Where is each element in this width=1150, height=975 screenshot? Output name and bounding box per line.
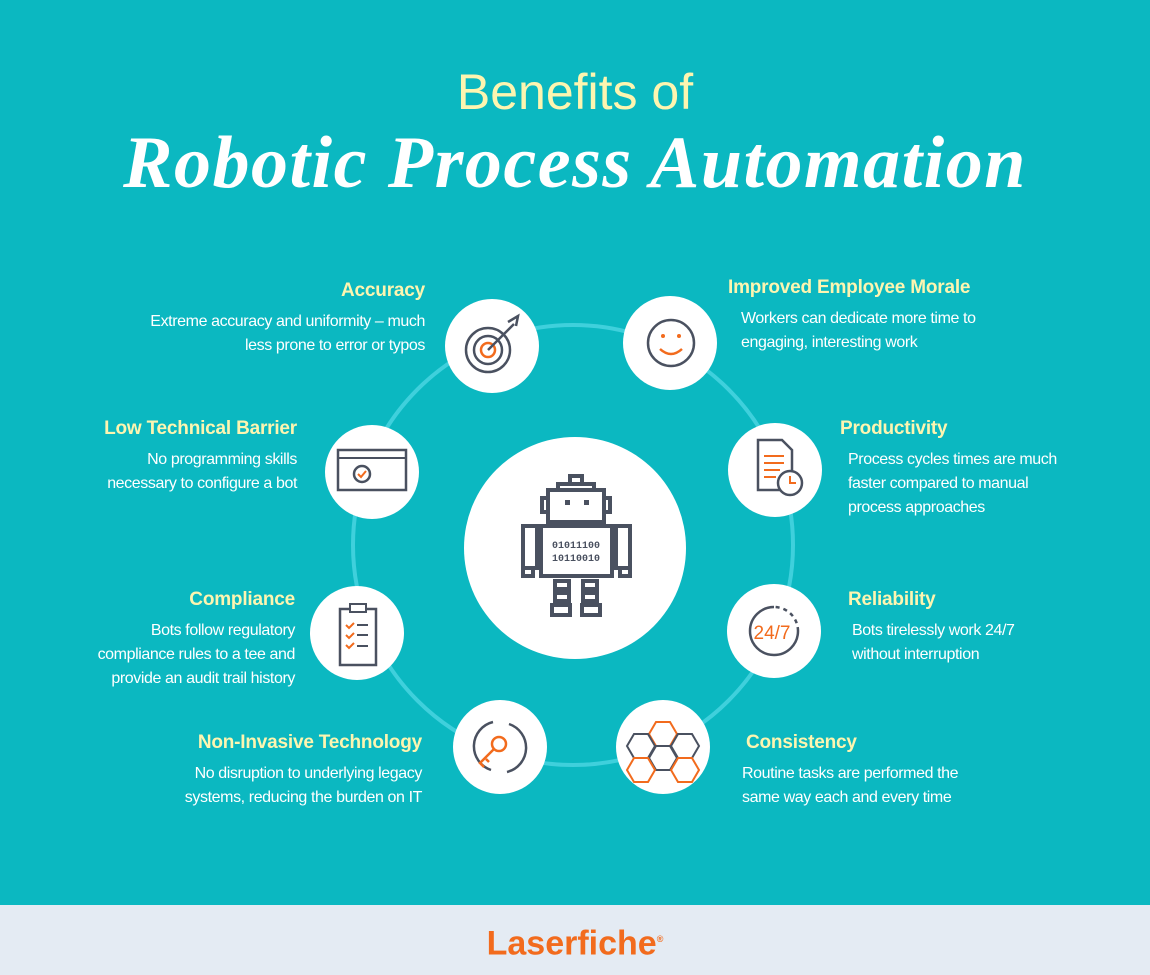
icon: target [445,299,539,393]
text: non-invasive: systems, reducing the burden on IT [185,789,422,806]
text: morale [728,277,976,351]
text: consistency: Consistency [746,732,857,753]
icon: browser [325,425,419,519]
text: productivity: process approaches [848,499,985,516]
text: compliance: compliance rules to a tee and [98,646,295,663]
text: accuracy [150,280,426,354]
text: consistency [742,732,958,806]
text: non-invasive: No disruption to underlying legacy [195,765,422,782]
icon: 24/7 [727,584,821,678]
icon: document clock [728,423,822,517]
icon: key refresh [453,700,547,794]
text: morale: Improved Employee Morale [728,277,970,298]
center robot [464,437,686,659]
text: low technical barrier: Low Technical Barrier [104,418,297,439]
text: consistency: same way each and every time [742,789,951,806]
text: morale: Workers can dedicate more time to [741,310,976,327]
text: accuracy: less prone to error or typos [245,337,425,354]
text: reliability: without interruption [852,646,979,663]
text: reliability: Bots tirelessly work 24/7 [852,622,1015,639]
icon: smile [623,296,717,390]
title: Robotic Process Automation [123,122,1027,204]
text: non-invasive [185,732,422,806]
text: reliability [848,589,1015,663]
text: low technical barrier [104,418,298,492]
center robot: 10110010 [552,554,600,565]
text: consistency: Routine tasks are performed the [742,765,958,782]
text: productivity: faster compared to manual [848,475,1028,492]
text: productivity: Process cycles times are much [848,451,1057,468]
text: compliance: Compliance [189,589,295,610]
icon: hexagons [616,700,710,794]
logo: Laserfiche® [487,924,663,962]
center robot: 01011100 [552,541,600,552]
text: productivity: Productivity [840,418,947,439]
icon: clipboard [310,586,404,680]
text: low technical barrier: No programming skills [147,451,297,468]
text: compliance [98,589,296,687]
title: Benefits of [457,64,693,120]
text: non-invasive: Non-Invasive Technology [198,732,422,753]
title [123,64,1027,204]
text: reliability: Reliability [848,589,936,610]
icon: 24/7: 24/7 [754,623,790,644]
text: low technical barrier: necessary to configure a bot [107,475,297,492]
text: compliance: Bots follow regulatory [151,622,295,639]
text: accuracy: Extreme accuracy and uniformity – much [150,313,425,330]
text: morale: engaging, interesting work [741,334,917,351]
footer [0,905,1150,975]
text: productivity [840,418,1057,516]
text: compliance: provide an audit trail history [111,670,295,687]
text: accuracy: Accuracy [341,280,425,301]
